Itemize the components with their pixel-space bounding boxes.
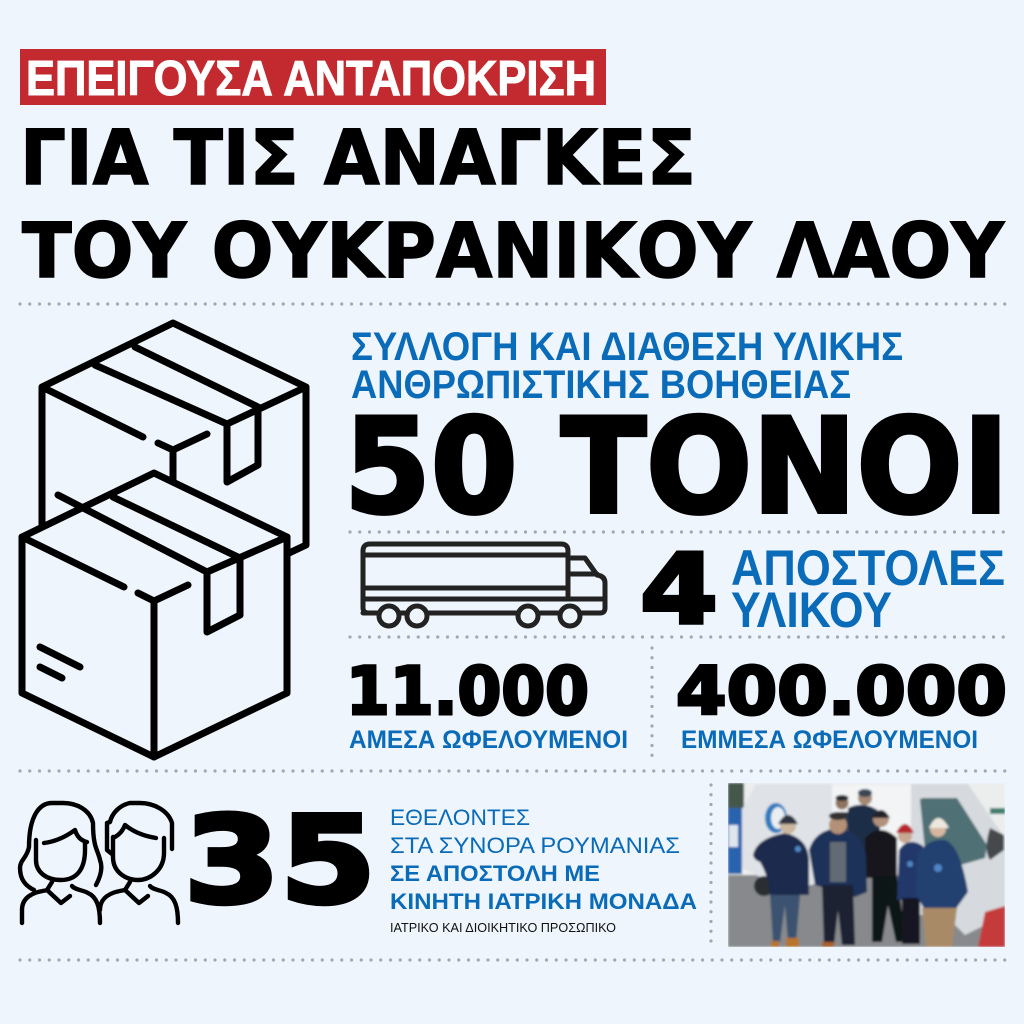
heading: collection of material aid	[351, 325, 903, 407]
heading: collection of material aid: ΣΥΛΛΟΓΗ ΚΑΙ ΔΙΑΘΕΣΗ ΥΛΙΚΗΣ	[351, 325, 903, 369]
red banner heading: ΕΠΕΙΓΟΥΣΑ ΑΝΤΑΠΟΚΡΙΣΗ	[26, 52, 596, 106]
volunteers description	[390, 805, 697, 935]
stat: 4 shipments	[640, 534, 1005, 646]
big number: 50 tons: 50 ΤΟΝΟΙ	[344, 390, 1009, 543]
volunteers description: ΙΑΤΡΙΚΟ ΚΑΙ ΔΙΟΙΚΗΤΙΚΟ ΠΡΟΣΩΠΙΚΟ	[390, 920, 616, 935]
volunteers description: ΚΙΝΗΤΗ ΙΑΤΡΙΚΗ ΜΟΝΑΔΑ	[390, 889, 697, 914]
icon: two volunteers	[20, 803, 178, 923]
stat: 400,000 indirect beneficiaries	[676, 653, 1007, 754]
photo: volunteers in front of mobile medical van	[728, 783, 1005, 947]
stat: 4 shipments: ΥΛΙΚΟΥ	[731, 582, 892, 638]
volunteers description: ΣΤΑ ΣΥΝΟΡΑ ΡΟΥΜΑΝΙΑΣ	[390, 833, 680, 858]
main title	[20, 113, 1005, 295]
stat: 11,000 direct beneficiaries	[346, 653, 628, 754]
stat: 11,000 direct beneficiaries: ΑΜΕΣΑ ΩΦΕΛΟΥΜΕΝΟΙ	[349, 726, 628, 754]
icon: truck	[363, 544, 605, 626]
volunteers description: ΣΕ ΑΠΟΣΤΟΛΗ ΜΕ	[390, 861, 600, 886]
stat: 400,000 indirect beneficiaries: ΕΜΜΕΣΑ ΩΦΕΛΟΥΜΕΝΟΙ	[681, 726, 978, 754]
stat: 4 shipments: 4	[640, 534, 718, 646]
main title: ΓΙΑ ΤΙΣ ΑΝΑΓΚΕΣ	[20, 113, 696, 202]
stat: 11,000 direct beneficiaries: 11.000	[346, 653, 589, 730]
icon: stacked cardboard boxes	[22, 323, 306, 757]
heading: collection of material aid: ΑΝΘΡΩΠΙΣΤΙΚΗΣ ΒΟΗΘΕΙΑΣ	[351, 363, 851, 407]
main title: ΤΟΥ ΟΥΚΡΑΝΙΚΟΥ ΛΑΟΥ	[22, 206, 1005, 295]
big number: 35 volunteers: 35	[184, 792, 376, 931]
volunteers description: ΕΘΕΛΟΝΤΕΣ	[390, 805, 530, 830]
stat: 400,000 indirect beneficiaries: 400.000	[676, 653, 1007, 730]
